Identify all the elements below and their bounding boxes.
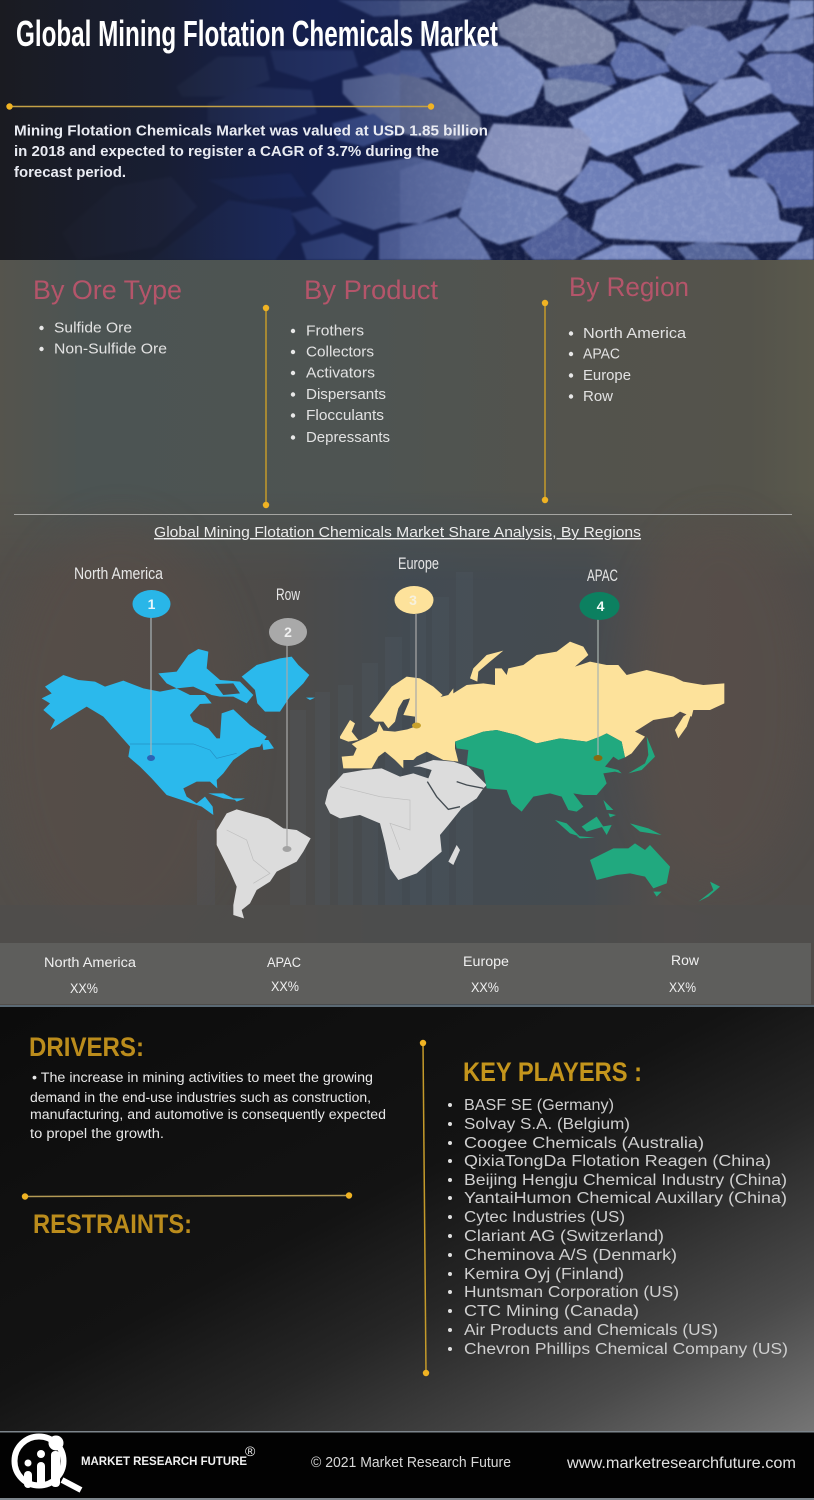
map region: europe and russia (340, 642, 724, 768)
map region: south america (217, 809, 311, 918)
data: europe share (463, 954, 509, 995)
text block: drivers: demand in the end-use industries such as construction, (30, 1090, 371, 1105)
list: key players: Clariant AG (Switzerland) (464, 1228, 664, 1245)
list: products: Activators (306, 366, 375, 382)
marker: row pin: Row (276, 585, 301, 604)
title: Global Mining Flotation Chemicals Market (16, 13, 498, 54)
panel: hero rock photo (0, 0, 814, 260)
list: ore types: Non-Sulfide Ore (54, 342, 167, 358)
list: regions: Row (583, 389, 614, 405)
heading: by product: By Product (304, 275, 439, 305)
list: key players: Air Products and Chemicals (US) (464, 1322, 718, 1339)
divider: gold connector (6, 103, 434, 110)
list: key players: Kemira Oyj (Finland) (464, 1266, 624, 1283)
data: row share: XX% (669, 980, 696, 995)
list: key players: Huntsman Corporation (US) (464, 1284, 679, 1301)
text block: drivers (30, 1070, 386, 1141)
list: key players: Chevron Phillips Chemical Company (US) (464, 1341, 788, 1358)
panel: regional share band (0, 943, 811, 1004)
text block: market summary: in 2018 and expected to register a CAGR of 3.7% during the (14, 144, 439, 160)
list: ore types: Sulfide Ore (54, 320, 132, 336)
brand name: MARKET RESEARCH FUTURE (81, 1454, 247, 1468)
divider: gold vertical two (542, 300, 548, 503)
panel: footer (0, 1431, 814, 1500)
list: products: Frothers (306, 324, 364, 340)
list: key players: Beijing Hengju Chemical Industry (China) (464, 1172, 787, 1189)
text block: drivers: manufacturing, and automotive is consequently expected (30, 1107, 386, 1122)
list: products: Depressants (306, 430, 390, 446)
list: key players: YantaiHumon Chemical Auxillary (China) (464, 1190, 787, 1207)
data: north america share (44, 955, 137, 996)
list: key players (448, 1097, 788, 1358)
data: north america share: XX% (70, 981, 98, 996)
list: regions: APAC (583, 346, 620, 362)
list: key players: Cheminova A/S (Denmark) (464, 1247, 677, 1264)
marker: apac pin: APAC (587, 566, 618, 585)
data: row share: Row (671, 953, 699, 968)
list: key players: Cytec Industries (US) (464, 1209, 625, 1226)
list: regions (569, 326, 687, 405)
data: europe share: XX% (471, 980, 499, 995)
panel: by product (291, 275, 439, 446)
text block: drivers: to propel the growth. (30, 1126, 164, 1141)
heading: drivers: DRIVERS: (29, 1032, 144, 1062)
illustration: ore rocks (62, 0, 814, 260)
list: products: Dispersants (306, 387, 386, 403)
map region: africa and middle east (325, 760, 487, 880)
heading: map section title: Global Mining Flotation Chemicals Market Share Analysis, By Regions (154, 525, 641, 541)
marker: north america pin: 1 (148, 596, 156, 612)
data: europe share: Europe (463, 954, 509, 969)
marker: europe pin: 3 (409, 592, 417, 608)
website: www.marketresearchfuture.com (566, 1455, 796, 1472)
data: apac share (267, 955, 301, 994)
icon: market research future logo (14, 1436, 81, 1490)
world map (42, 642, 724, 918)
marker: north america pin: North America (74, 564, 163, 583)
heading: restraints: RESTRAINTS: (33, 1209, 192, 1239)
data: north america share: North America (44, 955, 137, 970)
panel: segmentation and map background (0, 260, 814, 1006)
text block: market summary: forecast period. (14, 165, 126, 181)
list: key players: QixiaTongDa Flotation Reagen (China) (464, 1153, 771, 1170)
marker: apac pin (580, 566, 620, 761)
text block: drivers: • The increase in mining activities to meet the growing (32, 1070, 373, 1085)
marker: row pin: 2 (284, 624, 292, 640)
marker: europe pin: Europe (398, 554, 439, 573)
text block: market summary (14, 124, 488, 181)
list: key players: Coogee Chemicals (Australia) (464, 1135, 704, 1152)
divider: gold vertical three (420, 1040, 429, 1376)
list: key players: BASF SE (Germany) (464, 1097, 614, 1114)
marker: europe pin (394, 554, 439, 728)
panel: by region (569, 272, 689, 405)
heading: key players: KEY PLAYERS : (463, 1057, 642, 1087)
copyright: © 2021 Market Research Future (311, 1455, 511, 1471)
data: apac share: APAC (267, 955, 301, 970)
heading: by ore type: By Ore Type (33, 275, 182, 305)
list: products: Flocculants (306, 408, 384, 424)
list: products (291, 324, 390, 446)
divider: gold horizontal (22, 1192, 352, 1200)
list: regions: Europe (583, 368, 631, 384)
map region: asia pacific (455, 730, 720, 902)
list: key players: Solvay S.A. (Belgium) (464, 1116, 630, 1133)
heading: by region: By Region (569, 272, 689, 302)
list: regions: North America (583, 326, 687, 342)
divider: gold vertical one (263, 305, 269, 508)
registered mark: ® (245, 1443, 256, 1459)
list: key players: CTC Mining (Canada) (464, 1303, 639, 1320)
map region: north america (42, 649, 315, 815)
data: row share (669, 953, 699, 995)
data: apac share: XX% (271, 979, 299, 994)
marker: apac pin: 4 (597, 598, 605, 614)
panel: by ore type (33, 275, 182, 358)
marker: row pin (269, 585, 307, 852)
panel: drivers, restraints and key players (0, 1005, 814, 1432)
marker: north america pin (74, 564, 170, 761)
text block: market summary: Mining Flotation Chemicals Market was valued at USD 1.85 billion (14, 124, 488, 140)
list: ore types (39, 320, 167, 358)
list: products: Collectors (306, 344, 374, 360)
